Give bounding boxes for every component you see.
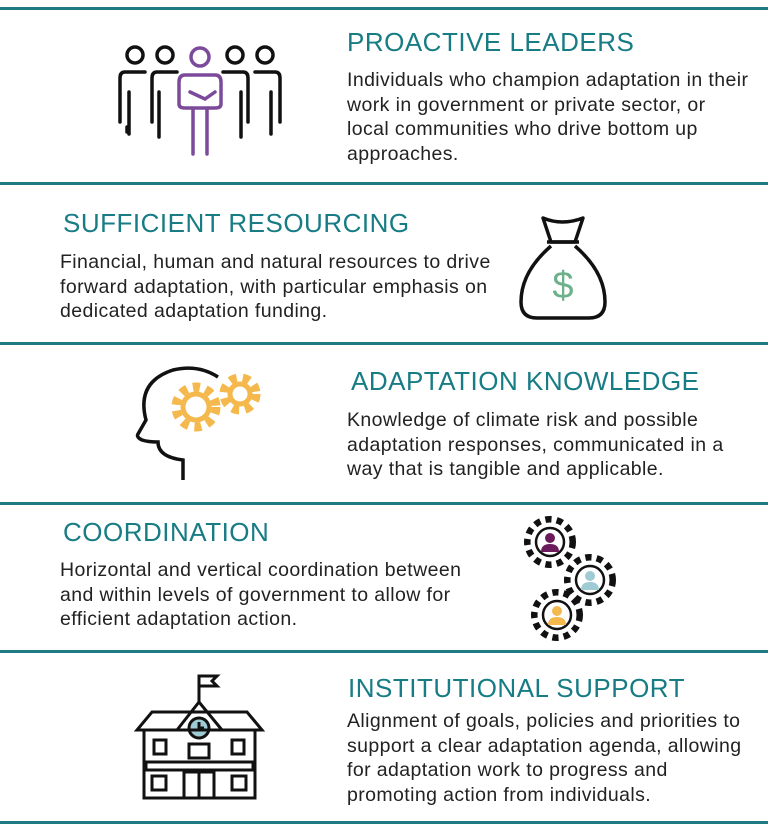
text: sufficient resourcing: forward adaptation, with particular emphasis on bbox=[60, 276, 487, 298]
text: sufficient resourcing bbox=[60, 251, 491, 322]
text: institutional support bbox=[347, 710, 741, 806]
text: adaptation knowledge: adaptation responses, communicated in a bbox=[347, 434, 724, 456]
text: adaptation knowledge: way that is tangible and applicable. bbox=[347, 458, 664, 480]
title: proactive leaders: PROACTIVE LEADERS bbox=[347, 27, 634, 57]
icon: gears with people bbox=[524, 516, 616, 641]
text: coordination: and within levels of government to allow for bbox=[60, 584, 450, 606]
text: proactive leaders: approaches. bbox=[347, 142, 459, 164]
icon: head with gears bbox=[136, 366, 260, 480]
icon: school building bbox=[134, 674, 266, 800]
text: sufficient resourcing: Financial, human and natural resources to drive bbox=[60, 251, 491, 273]
text: institutional support: Alignment of goals, policies and priorities to bbox=[347, 710, 740, 732]
text: proactive leaders bbox=[347, 69, 748, 164]
title: adaptation knowledge: ADAPTATION KNOWLEDGE bbox=[351, 366, 700, 396]
icon: money bag bbox=[519, 216, 607, 320]
text: proactive leaders: local communities who drive bottom up bbox=[347, 118, 698, 140]
icon: leaders bbox=[118, 45, 282, 156]
text: coordination: efficient adaptation action. bbox=[60, 608, 297, 630]
title: sufficient resourcing: SUFFICIENT RESOURCING bbox=[63, 208, 410, 238]
title: institutional support: INSTITUTIONAL SUPPORT bbox=[348, 673, 685, 703]
text: sufficient resourcing: dedicated adaptation funding. bbox=[60, 300, 327, 322]
text: institutional support: support a clear adaptation agenda, allowing bbox=[347, 734, 741, 756]
text: proactive leaders: Individuals who champion adaptation in their bbox=[347, 69, 748, 91]
text: coordination bbox=[60, 559, 461, 630]
icon: money bag: $ bbox=[552, 265, 574, 307]
text: coordination: Horizontal and vertical coordination between bbox=[60, 559, 461, 581]
title: coordination: COORDINATION bbox=[63, 517, 269, 547]
text: institutional support: promoting action from individuals. bbox=[347, 784, 651, 806]
text: proactive leaders: work in government or private sector, or bbox=[347, 94, 705, 116]
text: institutional support: for adaptation work to progress and bbox=[347, 759, 668, 781]
text: adaptation knowledge bbox=[347, 409, 724, 480]
text: adaptation knowledge: Knowledge of climate risk and possible bbox=[347, 409, 698, 431]
